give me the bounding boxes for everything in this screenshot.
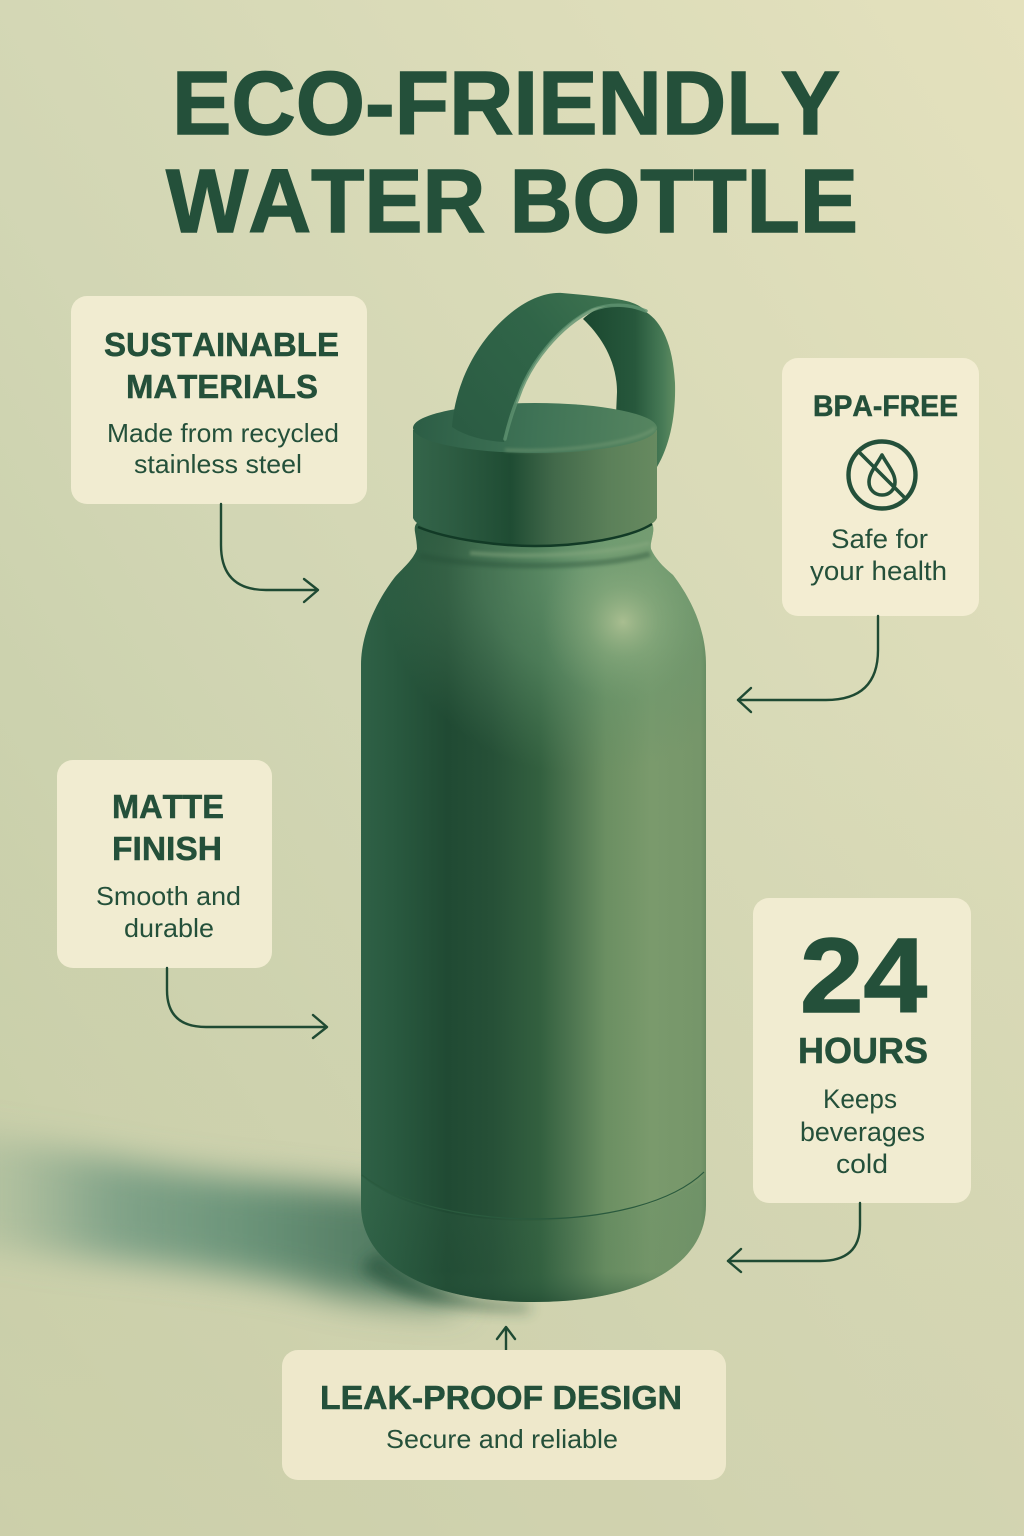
description: leak-proof design: Secure and reliable bbox=[386, 1424, 618, 1454]
bottle handle: front band bbox=[452, 293, 647, 442]
description: matte finish: durable bbox=[124, 913, 214, 943]
panel: 24 hours bbox=[753, 898, 971, 1203]
bottle body bbox=[355, 515, 715, 1310]
panel: matte finish bbox=[57, 760, 272, 968]
heading: matte finish: FINISH bbox=[112, 830, 222, 867]
description: 24 hours: cold bbox=[836, 1149, 888, 1179]
title bbox=[166, 54, 858, 252]
heading: sustainable materials bbox=[104, 326, 339, 405]
description: bpa-free: Safe for bbox=[831, 524, 928, 554]
panel: leak-proof design bbox=[282, 1350, 726, 1480]
icon: crossed-out water drop bbox=[848, 442, 916, 508]
arrow: 24 hours bbox=[728, 1203, 860, 1272]
description: 24 hours bbox=[800, 1084, 925, 1179]
description: matte finish bbox=[96, 881, 241, 943]
description: sustainable materials: stainless steel bbox=[134, 449, 302, 479]
heading: leak-proof design: LEAK-PROOF DESIGN bbox=[320, 1379, 682, 1416]
description: sustainable materials: Made from recycled bbox=[107, 418, 339, 448]
heading: matte finish bbox=[112, 788, 224, 867]
heading: bpa-free: BPA-FREE bbox=[813, 390, 958, 423]
description: bpa-free: your health bbox=[810, 556, 947, 586]
heading: matte finish: MATTE bbox=[112, 788, 224, 825]
arrow: sustainable materials bbox=[221, 504, 318, 602]
title: ECO-FRIENDLY bbox=[172, 54, 840, 154]
heading: sustainable materials: MATERIALS bbox=[126, 368, 318, 405]
heading: hours: HOURS bbox=[798, 1030, 928, 1071]
panel: bpa-free bbox=[782, 358, 979, 616]
stat: 24: 24 bbox=[800, 917, 927, 1035]
arrow: matte finish bbox=[167, 968, 327, 1038]
description: matte finish: Smooth and bbox=[96, 881, 241, 911]
description: 24 hours: beverages bbox=[800, 1117, 925, 1147]
bottle cap bbox=[413, 403, 657, 546]
title: WATER BOTTLE bbox=[166, 152, 858, 252]
description: bpa-free bbox=[810, 524, 947, 586]
arrow: bpa-free bbox=[738, 616, 878, 712]
panel: sustainable materials bbox=[71, 296, 367, 504]
bottle cast shadow bbox=[0, 1130, 530, 1311]
arrow: leak-proof design bbox=[497, 1327, 515, 1356]
heading: sustainable materials: SUSTAINABLE bbox=[104, 326, 339, 363]
description: sustainable materials bbox=[107, 418, 339, 479]
bottle handle: rear band bbox=[583, 305, 675, 470]
description: 24 hours: Keeps bbox=[823, 1084, 897, 1114]
